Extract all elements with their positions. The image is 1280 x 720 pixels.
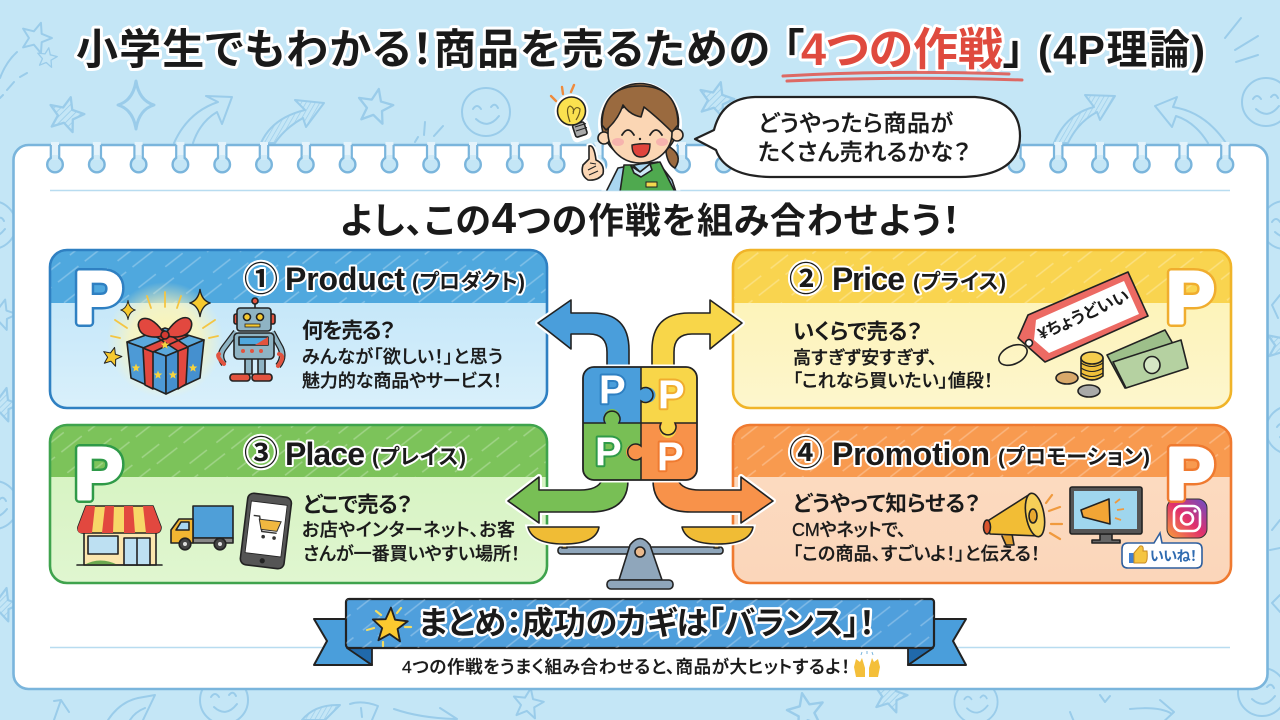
panel heading: ② [789, 261, 823, 299]
icon: price tag [996, 272, 1148, 369]
icon: like badge [1122, 533, 1202, 568]
icon: store [77, 506, 162, 565]
icon: star [367, 607, 411, 646]
balance scale [528, 527, 753, 589]
panel text: 高すぎず安すぎず、 [793, 348, 937, 368]
title: (4P理論) [1038, 27, 1205, 73]
big P badge: P [74, 434, 123, 514]
arrow: to promotion [653, 477, 773, 523]
big P badge: P [1166, 258, 1215, 338]
big P badge: P [74, 258, 123, 338]
puzzle of four Ps: P [595, 430, 622, 474]
big P badge: P [74, 258, 123, 338]
panel text: 「これなら買いたい」値段！ [793, 371, 993, 391]
icon: raised hands [854, 651, 880, 677]
panel heading: (プロモーション) [998, 446, 1150, 469]
icon: megaphone [984, 492, 1062, 545]
panel text: 魅力的な商品やサービス！ [302, 371, 502, 391]
panel heading: (プレイス) [372, 446, 466, 469]
speech bubble: どうやったら商品が [758, 110, 953, 136]
panel heading: Promotion [832, 436, 990, 472]
ribbon heading: まとめ：成功のカギは「バランス」！ [419, 605, 875, 641]
icon: robot [218, 298, 282, 381]
hand: pointing finger [582, 146, 603, 180]
big P badge: P [74, 434, 123, 514]
arrow: to product [538, 300, 629, 367]
panel text: どうやって知らせる？ [793, 492, 980, 516]
panel text: お店やインターネット、お客 [302, 520, 515, 540]
panel text: 「この商品、すごいよ！」と伝える！ [793, 544, 1040, 564]
icon: gift box [101, 282, 223, 398]
panel heading: ① [244, 261, 278, 299]
puzzle of four Ps [583, 367, 697, 480]
arrow: to price [652, 300, 742, 367]
panel: product [50, 250, 547, 408]
icon: delivery truck [171, 506, 233, 550]
panel heading: Product [285, 261, 405, 297]
icon: light bulb [551, 85, 590, 141]
speech bubble [695, 97, 1020, 177]
panel heading [244, 261, 525, 299]
panel text: みんなが「欲しい！」と思う [302, 346, 503, 367]
icon: price tag: ¥ちょうどいい [1035, 286, 1132, 344]
icon: instagram logo [1167, 499, 1207, 538]
panel: promotion [733, 425, 1231, 583]
icon: tv screen [1070, 487, 1142, 543]
arrow: to place [508, 477, 628, 523]
panel heading: Place [285, 436, 365, 472]
panel heading: ④ [789, 435, 823, 473]
big P badge: P [1166, 434, 1215, 514]
title [76, 24, 1205, 81]
title: 」 [1003, 26, 1024, 73]
speech bubble: たくさん売れるかな？ [758, 139, 970, 165]
title: 4つの作戦 [801, 24, 1003, 75]
icon: smartphone with cart [240, 493, 292, 569]
subheading: よし、この4つの作戦を組み合わせよう！ [340, 194, 960, 243]
panel: place [50, 425, 547, 583]
panel text: さんが一番買いやすい場所！ [303, 543, 520, 564]
panel text [302, 319, 503, 391]
panel heading [789, 261, 1006, 299]
title: 「 [783, 26, 804, 73]
panel heading: ③ [244, 435, 278, 473]
ribbon subtext: 4つの作戦をうまく組み合わせると、商品が大ヒットするよ！ [402, 657, 850, 677]
panel text [793, 320, 993, 391]
character: shop clerk pointing up [598, 82, 683, 192]
panel text: CMやネットで、 [792, 520, 906, 540]
puzzle of four Ps: P [599, 368, 626, 412]
big P badge: P [1166, 258, 1215, 338]
panel heading: Price [832, 261, 905, 297]
panel heading [789, 435, 1150, 473]
big P badge: P [1166, 434, 1215, 514]
icon: coins and bills [1056, 330, 1188, 397]
panel text [302, 493, 520, 564]
puzzle of four Ps: P [658, 373, 685, 417]
summary ribbon [314, 599, 966, 677]
panel: price [733, 250, 1231, 408]
panel text: どこで売る？ [303, 493, 412, 517]
panel text: 何を売る？ [302, 319, 395, 343]
puzzle of four Ps: P [657, 435, 684, 479]
panel heading: (プロダクト) [412, 270, 525, 294]
panel heading: (プライス) [913, 271, 1006, 294]
panel text: いくらで売る？ [793, 320, 922, 344]
notebook paper panel [14, 142, 1268, 689]
icon: like badge: いいね！ [1150, 548, 1197, 564]
panel heading [244, 435, 466, 473]
title: 小学生でもわかる！商品を売るための [76, 26, 770, 73]
panel text [792, 492, 1040, 564]
